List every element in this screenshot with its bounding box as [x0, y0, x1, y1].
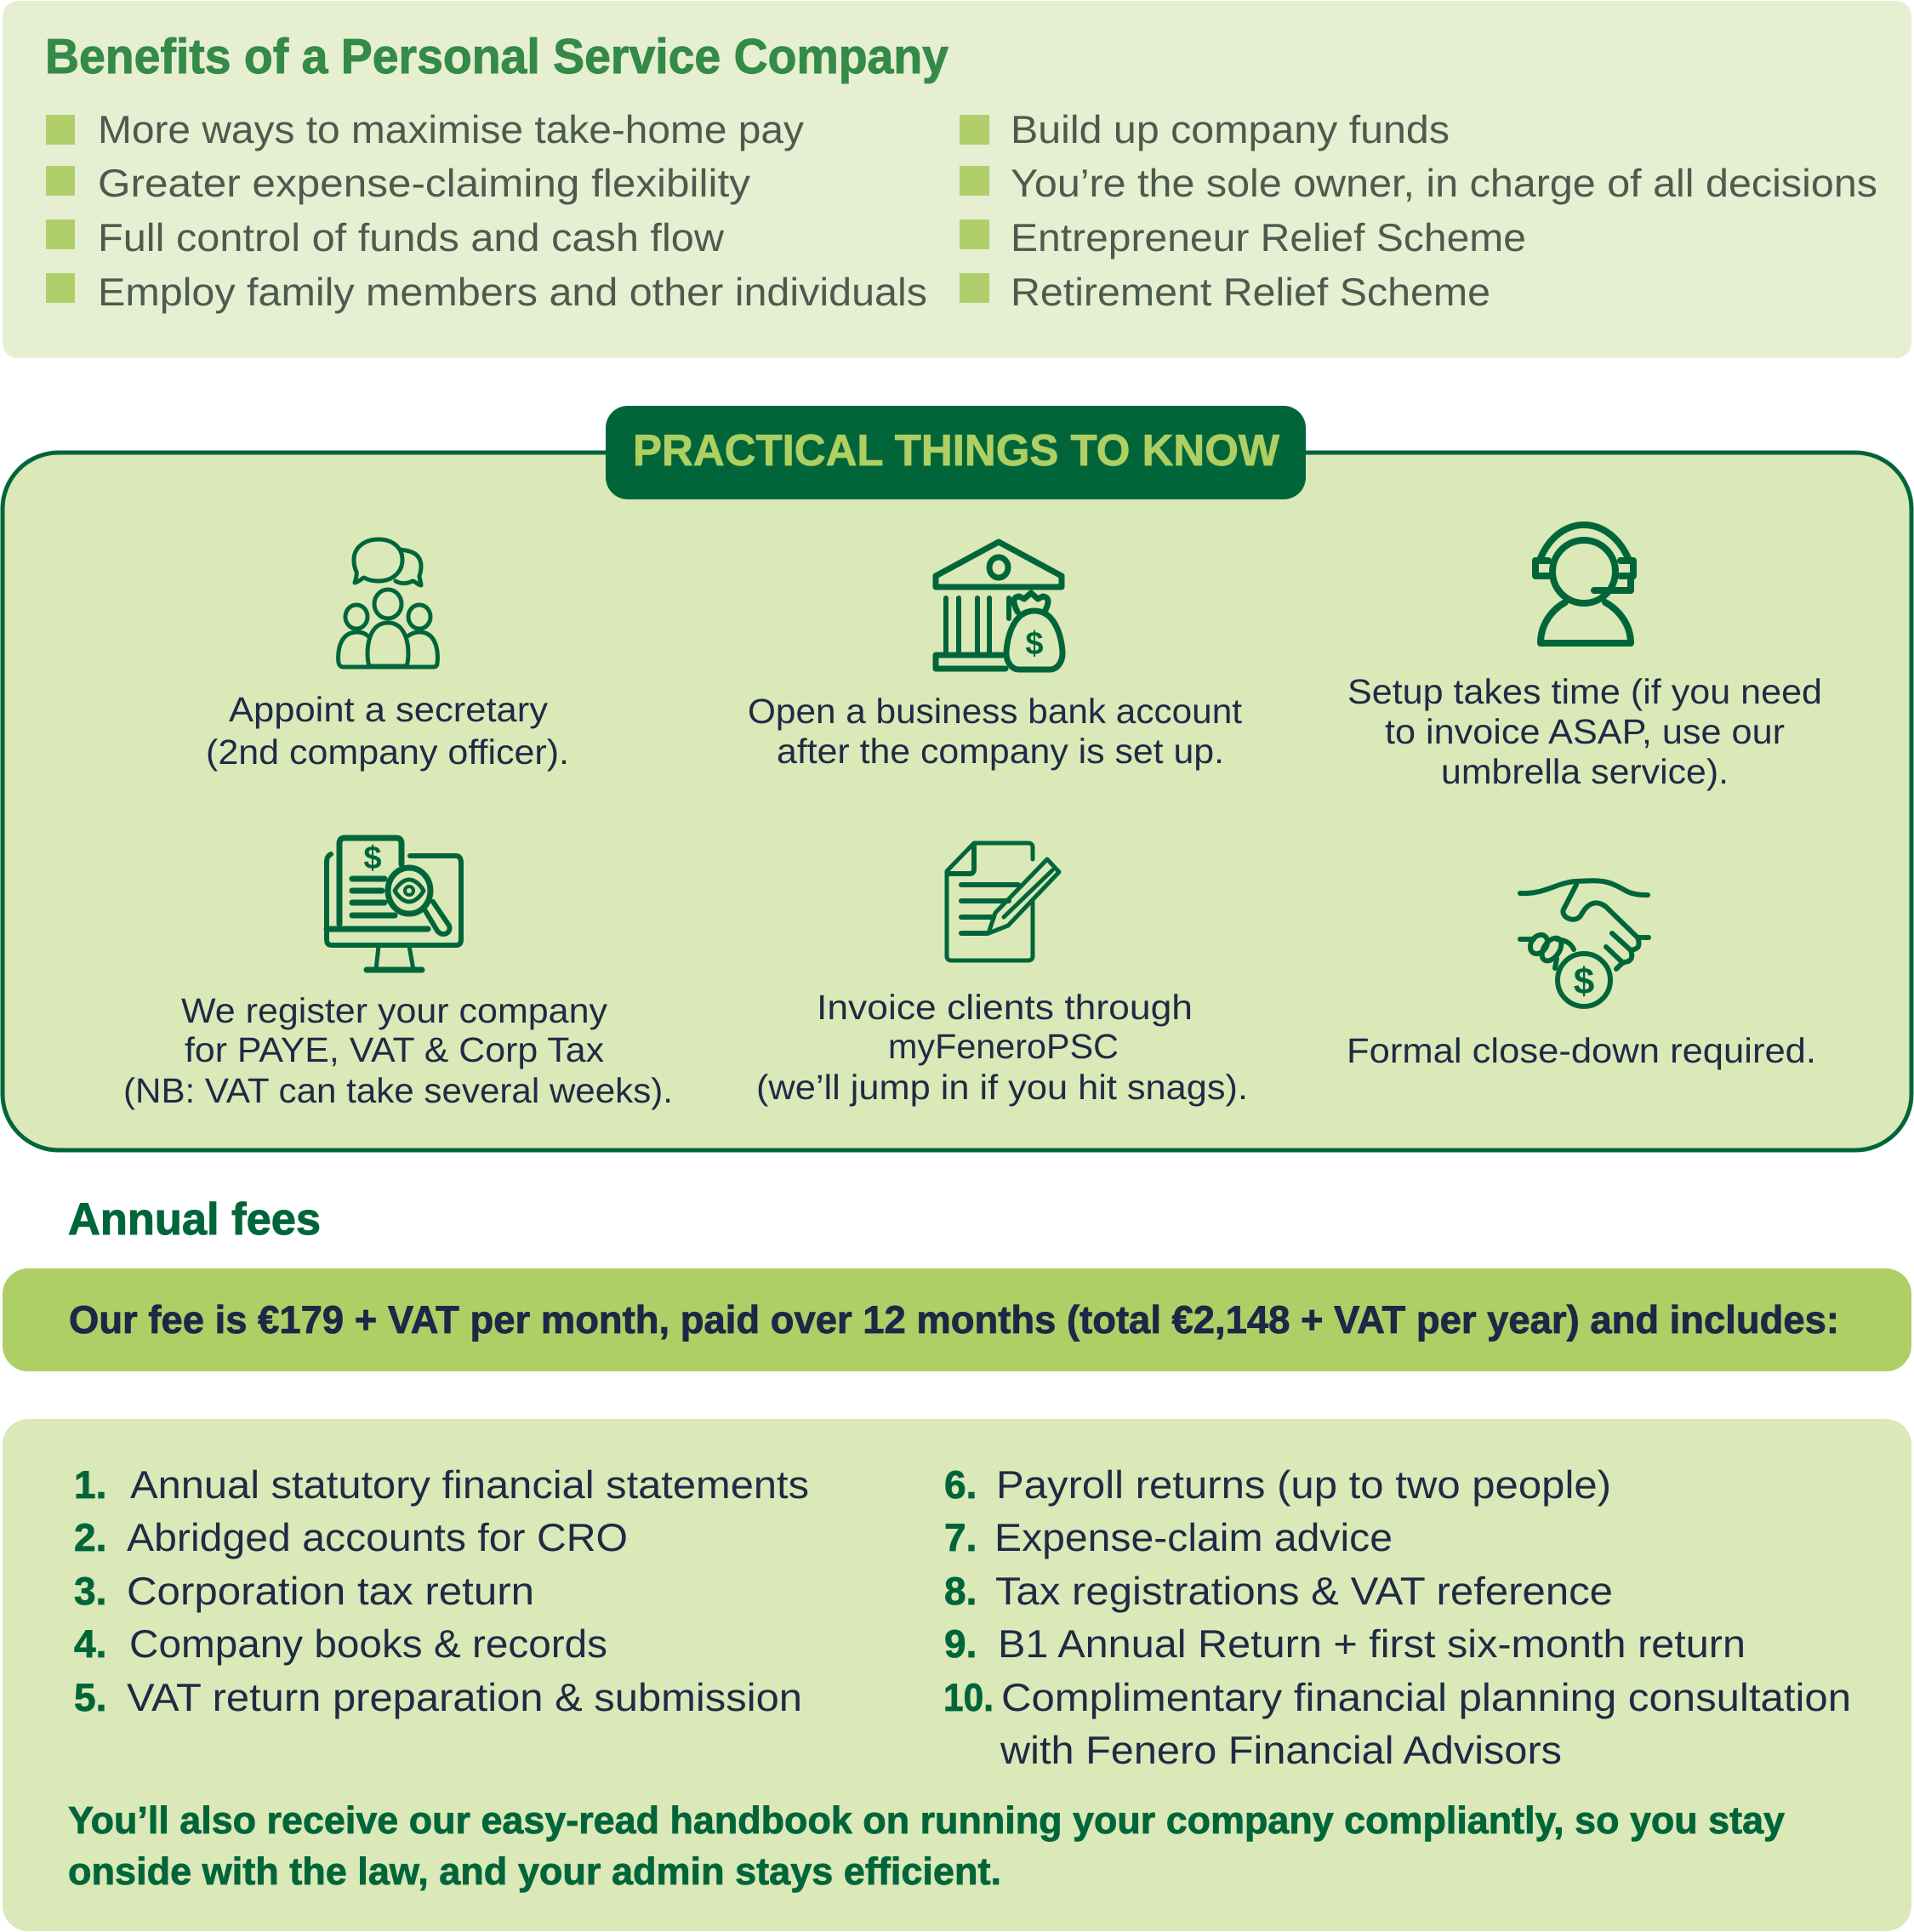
text: setup takes time: umbrella service). [1441, 752, 1729, 791]
numbered list: right column: 9. [944, 1621, 977, 1666]
icon glyph: dollar sign: $ [363, 841, 382, 876]
panel: practical things to know [3, 406, 1911, 1150]
numbered list: right column: 7. [944, 1515, 977, 1559]
icon: person with headset [1535, 525, 1633, 643]
icon: people with speech bubbles [339, 539, 437, 667]
text: invoice clients: (we’ll jump in if you hit snags). [756, 1068, 1248, 1107]
bullet list: left column: More ways to maximise take-home pay [98, 107, 804, 151]
bullet list: right column: Retirement Relief Scheme [1011, 270, 1490, 314]
text: we register your company: for PAYE, VAT & Corp Tax [185, 1030, 605, 1069]
text: open a business bank account [748, 692, 1243, 771]
text: open a business bank account: Open a business bank account [748, 692, 1243, 731]
numbered list: left column: 1. [74, 1462, 106, 1507]
text: formal close-down: Formal close-down required. [1347, 1031, 1816, 1070]
numbered list: left column [74, 1462, 809, 1719]
heading pill: practical things to know: PRACTICAL THINGS TO KNOW [633, 426, 1280, 476]
numbered list: left column: 2. [74, 1515, 106, 1559]
bullet list: right column: Build up company funds [1011, 107, 1450, 151]
text: appoint a secretary: Appoint a secretary [229, 690, 549, 729]
numbered list: right column: 8. [944, 1569, 977, 1613]
bullet list: right column: You’re the sole owner, in charge of all decisions [1011, 161, 1877, 205]
text: setup takes time: Setup takes time (if you need [1347, 672, 1822, 711]
closing note: handbook: onside with the law, and your admin stays efficient. [68, 1849, 1001, 1893]
numbered list: right column: with Fenero Financial Advisors [1000, 1728, 1562, 1772]
icon: document with pencil [947, 843, 1059, 960]
text: we register your company: We register your company [181, 991, 608, 1030]
bullet list: right column [960, 107, 1877, 314]
icon: handshake with coin [1520, 881, 1649, 1006]
fee banner [3, 1268, 1911, 1371]
text: we register your company: (NB: VAT can take several weeks). [123, 1071, 673, 1110]
numbered list: left column: Annual statutory financial statements [130, 1462, 809, 1507]
heading pill: practical things to know [606, 406, 1306, 499]
icon glyph: dollar sign: $ [1025, 626, 1044, 662]
numbered list: right column: Complimentary financial planning consultation [1001, 1675, 1851, 1719]
text: appoint a secretary: (2nd company officer). [206, 732, 569, 772]
heading: annual fees: Annual fees [68, 1194, 321, 1245]
fee banner: Our fee is €179 + VAT per month, paid over 12 months (total €2,148 + VAT per year) and includes: [69, 1297, 1839, 1342]
closing note: handbook [68, 1798, 1785, 1893]
text: we register your company [123, 991, 673, 1110]
numbered list: right column: 10. [943, 1675, 994, 1719]
numbered list: left column: 3. [74, 1569, 106, 1613]
panel: benefits [3, 1, 1911, 358]
numbered list: left column: Corporation tax return [127, 1569, 534, 1613]
numbered list: right column: 6. [944, 1462, 977, 1507]
text: setup takes time: to invoice ASAP, use our [1385, 712, 1785, 751]
icon: monitor with document and magnifier [327, 838, 461, 970]
text: invoice clients: myFeneroPSC [888, 1027, 1119, 1066]
bullet list: left column [46, 107, 927, 314]
numbered list: left column: 5. [74, 1675, 106, 1719]
numbered list: left column: 4. [74, 1621, 106, 1666]
bullet list: left column: Full control of funds and cash flow [98, 215, 725, 259]
numbered list: left column: Abridged accounts for CRO [127, 1515, 628, 1559]
numbered list: right column: Tax registrations & VAT reference [995, 1569, 1613, 1613]
numbered list: right column [943, 1462, 1851, 1772]
panel: fee inclusions [3, 1419, 1911, 1931]
icon glyph: dollar sign: $ [1574, 960, 1594, 1002]
bullet list: left column: Greater expense-claiming flexibility [98, 161, 750, 205]
text: setup takes time [1347, 672, 1822, 791]
numbered list: right column: Payroll returns (up to two people) [996, 1462, 1611, 1507]
bullet list: right column: Entrepreneur Relief Scheme [1011, 215, 1526, 259]
text: invoice clients: Invoice clients through [817, 988, 1193, 1027]
numbered list: right column: Expense-claim advice [994, 1515, 1393, 1559]
icon: bank with money bag [936, 542, 1062, 670]
bullet list: left column: Employ family members and other individuals [98, 270, 927, 314]
text: open a business bank account: after the company is set up. [777, 732, 1224, 771]
numbered list: left column: VAT return preparation & submission [127, 1675, 802, 1719]
text: invoice clients [756, 988, 1248, 1107]
text: appoint a secretary [206, 690, 569, 772]
closing note: handbook: You’ll also receive our easy-read handbook on running your company compliantly, so you stay [68, 1798, 1785, 1842]
numbered list: right column: B1 Annual Return + first six-month return [998, 1621, 1746, 1666]
numbered list: left column: Company books & records [129, 1621, 607, 1666]
heading: benefits: Benefits of a Personal Service Company [45, 29, 948, 84]
